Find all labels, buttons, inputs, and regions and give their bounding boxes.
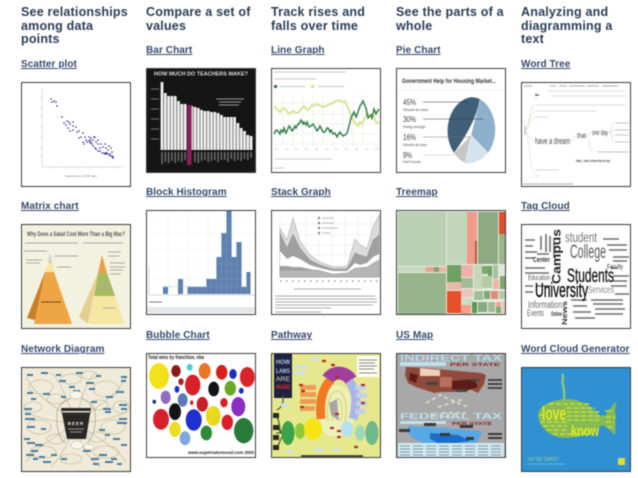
- heading: relationships column: See relationships: [21, 5, 128, 19]
- pie labels: 9%: [403, 151, 412, 160]
- word: Education: Education: [528, 275, 550, 282]
- pie slices: [447, 97, 495, 163]
- chart: tag cloud: [520, 223, 632, 330]
- right pyramid callouts: [99, 252, 125, 308]
- title block: MADE: [276, 384, 290, 391]
- data table: [398, 443, 504, 457]
- scatter axis title: Investment in GDP ratio: [65, 174, 97, 178]
- pie labels: Should do more: [403, 108, 428, 112]
- word: University: University: [535, 280, 588, 302]
- dark green series: [274, 101, 379, 137]
- center rosette: [329, 399, 339, 421]
- word: Faculty: Faculty: [607, 264, 623, 271]
- stack layer mid: [280, 233, 379, 277]
- link label: Scatter plot: Scatter plot: [21, 59, 77, 70]
- heading: text analysis column: text: [521, 32, 544, 46]
- footnote: [274, 159, 332, 168]
- right pyramid: [79, 255, 124, 324]
- chart: scatter plot: [20, 81, 132, 188]
- link label: Bubble Chart: Bubble Chart: [146, 330, 210, 341]
- lower map: [408, 426, 482, 447]
- stack grid: [280, 215, 379, 277]
- network branches: [24, 371, 129, 467]
- link label: Line Graph: Line Graph: [271, 45, 325, 56]
- chart: treemap: [395, 209, 507, 316]
- line chart caption: [274, 72, 346, 79]
- pie labels: 16%: [403, 133, 416, 142]
- lower map labels: [399, 423, 502, 440]
- word tree leaf text: [597, 123, 629, 152]
- link label: Stack Graph: Stack Graph: [271, 187, 331, 198]
- chart: US map infographic: [395, 352, 507, 459]
- histogram block separators: [163, 211, 250, 294]
- link label: Word Cloud Generator: Word Cloud Generator: [521, 344, 630, 355]
- toolbar: [524, 85, 618, 87]
- lavender stage labels: [355, 385, 367, 414]
- word: Services: Services: [588, 285, 614, 296]
- chart: word cloud whale: [520, 366, 632, 473]
- heading: parts of a whole column: [395, 5, 504, 33]
- scroll bar: [523, 183, 573, 185]
- lower title: FEDERAL TAX: [400, 412, 503, 421]
- heading: relationships column: [20, 5, 128, 46]
- word tree branch: that: that: [577, 131, 587, 140]
- stack x labels: [280, 280, 379, 282]
- poster logo: [618, 458, 625, 465]
- stack white band: [280, 251, 379, 274]
- matrix subtitles: [25, 242, 123, 244]
- top map labels: [426, 379, 502, 392]
- link label: US Map: US Map: [396, 330, 433, 341]
- pie labels: 45%: [403, 98, 416, 107]
- top map: [405, 367, 486, 393]
- green and yellow nodes: [282, 418, 378, 445]
- heading: compare column: values: [146, 19, 186, 33]
- whale filler words: [539, 404, 615, 434]
- stack paragraph: [275, 296, 377, 312]
- light green series: [274, 100, 379, 126]
- heading: relationships column: points: [21, 32, 60, 46]
- pie labels: 30%: [403, 115, 416, 124]
- orange stage labels: [300, 385, 316, 411]
- note: [216, 99, 244, 105]
- word: love: love: [542, 404, 566, 425]
- chart: pathway diagram: [270, 352, 382, 459]
- left tree branches: [276, 395, 283, 447]
- link label: Bar Chart: Bar Chart: [146, 45, 192, 56]
- treemap large blocks: [398, 212, 506, 314]
- title block: ARE: [276, 377, 290, 383]
- heading: time column: Track rises and: [271, 5, 365, 19]
- heading: compare column: [146, 5, 252, 33]
- word: Online: Online: [551, 312, 562, 318]
- heading: parts of a whole column: whole: [396, 19, 432, 33]
- y axis labels: [151, 89, 159, 139]
- poster caption: DAY ONE TEMPEST: [528, 457, 559, 463]
- scatter points: [51, 99, 113, 158]
- title block: [274, 354, 292, 398]
- link label: Matrix chart: Matrix chart: [21, 201, 79, 212]
- histogram footer bar: [147, 307, 255, 313]
- poster subcaption: [528, 463, 565, 465]
- center pale ground: [315, 385, 355, 437]
- top subtitle: PER STATE: [450, 362, 500, 367]
- network blue labels: [24, 373, 127, 464]
- heading: text analysis column: diagramming a: [521, 19, 613, 33]
- money tree ornament: [426, 393, 468, 417]
- treemap small blocks: [447, 265, 506, 314]
- word tree root phrase: have a dream: [535, 136, 570, 146]
- word tree connectors right: [570, 123, 614, 152]
- tree connectors: [526, 105, 535, 175]
- bar name labels: [162, 152, 251, 164]
- bubble chart title: Total wins by franchise, nba: [148, 355, 204, 361]
- heading: text analysis column: Analyzing and: [521, 5, 608, 19]
- upper branches text: [535, 91, 627, 117]
- concentric pathway arcs: [320, 373, 356, 421]
- bottom bar: [301, 455, 363, 457]
- stack caption: [294, 288, 361, 290]
- pie labels: [403, 98, 428, 164]
- word: Events: Events: [527, 308, 544, 318]
- word: Information: Information: [528, 300, 562, 311]
- network jar bubbles: [70, 391, 94, 450]
- link label: Pie Chart: Pie Chart: [396, 45, 441, 56]
- link label: Pathway: Pathway: [271, 330, 312, 341]
- bubbles: [149, 363, 255, 445]
- word: Campus: Campus: [550, 229, 564, 284]
- chart: word tree: [520, 81, 632, 188]
- light blue notes: [281, 359, 339, 451]
- scatter axes: [40, 88, 123, 169]
- link label: Tag Cloud: Tag Cloud: [521, 201, 570, 212]
- chart: bar chart on black: [145, 67, 257, 174]
- pie labels: Don't know: [403, 160, 421, 164]
- x axis labels: [275, 148, 379, 150]
- chart: line graph: [270, 67, 382, 174]
- histogram axes: [149, 266, 255, 295]
- whale body: [538, 399, 617, 438]
- red flags: [300, 361, 364, 447]
- white bars: [162, 82, 251, 150]
- chart: bubble chart: [145, 352, 257, 459]
- bottle outline: [57, 398, 95, 443]
- left pyramid: [27, 253, 72, 324]
- heading: time column: falls over time: [271, 19, 358, 33]
- heading: time column: [270, 5, 365, 33]
- word: know: know: [571, 423, 599, 440]
- highlighted bar: [187, 105, 192, 165]
- chart: block histogram: [145, 209, 257, 316]
- word: student: student: [565, 229, 597, 245]
- word: News: News: [562, 301, 569, 325]
- pie labels: Should do less: [403, 143, 427, 147]
- word tree branch: one day: one day: [592, 128, 608, 137]
- chart: stack graph: [270, 209, 382, 316]
- whale spout: [562, 374, 564, 400]
- chart: matrix pyramid chart: [20, 223, 132, 330]
- note box: [357, 356, 379, 377]
- bubble chart credit: www.supernaturesoul.com 2005: [187, 450, 255, 455]
- stack legend: [318, 217, 338, 234]
- chart: network diagram: [20, 366, 132, 473]
- tag cloud small filler words: [525, 234, 629, 318]
- histogram grid: [153, 212, 256, 294]
- link label: Block Histogram: Block Histogram: [146, 187, 227, 198]
- black icons: [273, 413, 279, 450]
- pie labels: Doing enough: [403, 125, 425, 129]
- heading: parts of a whole column: See the parts of a: [396, 5, 504, 19]
- chart: pie chart: [395, 67, 507, 174]
- left pyramid callouts: [24, 251, 78, 267]
- stack layer light: [280, 215, 379, 277]
- grid: [274, 94, 379, 146]
- beer glass: BEER: [68, 421, 84, 426]
- heading: relationships column: among data: [21, 19, 93, 33]
- top title: INDIRECT TAX: [400, 353, 502, 363]
- link label: Word Tree: Word Tree: [521, 59, 570, 70]
- lower branch text: [535, 170, 559, 176]
- link label: Network Diagram: Network Diagram: [21, 344, 104, 355]
- bar chart title: HOW MUCH DO TEACHERS MAKE?: [154, 72, 248, 78]
- title block: LAWS: [276, 368, 290, 375]
- heading: text analysis column: [520, 5, 613, 46]
- line chart legend: [274, 85, 344, 88]
- histogram axis label: [149, 301, 162, 303]
- histogram bars: [163, 211, 250, 294]
- lower subtitle: PER STATE: [452, 421, 492, 426]
- stack bottom layer: [280, 260, 379, 277]
- title block: HOW: [276, 359, 291, 366]
- heading: compare column: Compare a set of: [146, 5, 251, 19]
- word: Center: Center: [533, 257, 550, 264]
- pie callouts: [423, 102, 483, 155]
- link label: Treemap: Treemap: [396, 187, 438, 198]
